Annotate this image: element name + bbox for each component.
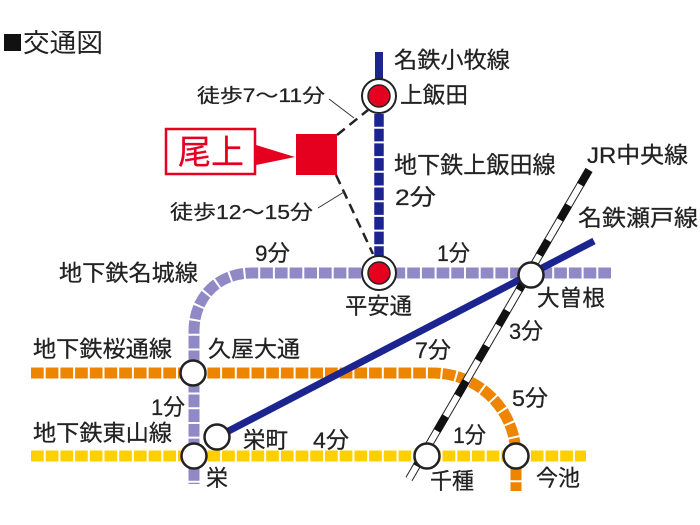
label: 1 minute Chikusa: 1分 — [453, 423, 486, 448]
station: Kamiiida — [362, 79, 396, 113]
label: 9 minutes: 9分 — [255, 241, 290, 266]
label: 2 minutes: 2分 — [395, 185, 436, 210]
label: Sakaemachi station: 栄町 — [243, 428, 288, 453]
label: walk 7-11 minutes: 徒歩7～11分 — [197, 85, 325, 107]
leader: walk 12-15 — [318, 192, 344, 208]
leader: walk 7-11 — [329, 99, 354, 118]
label: Meijo subway line: 地下鉄名城線 — [59, 261, 198, 286]
title: 交通図 — [23, 28, 103, 58]
line: Higashiyama subway — [31, 450, 586, 462]
label: Chikusa station: 千種 — [430, 469, 474, 494]
station: Hisaya-odori — [180, 360, 206, 386]
label: Imaike station: 今池 — [536, 466, 580, 491]
marker: Onoe location — [296, 134, 337, 175]
label: 3 minutes: 3分 — [509, 319, 543, 344]
station: Chikusa — [414, 444, 440, 468]
line: Meijo subway — [194, 273, 611, 484]
label: Meitetsu Komaki line: 名鉄小牧線 — [394, 48, 510, 73]
station: Sakae — [182, 444, 206, 468]
label: 5 minutes: 5分 — [512, 386, 548, 411]
station: Imaike — [504, 444, 528, 468]
label: Higashiyama subway line: 地下鉄東山線 — [33, 421, 172, 446]
label: walk 12-15 minutes: 徒歩12～15分 — [170, 201, 313, 224]
label: Sakae station: 栄 — [206, 466, 228, 491]
station: Heian-dori — [362, 256, 396, 290]
station: Ozone — [518, 262, 544, 288]
label: Kamiiida station: 上飯田 — [400, 83, 468, 108]
callout: Onoe: 尾上 — [178, 134, 244, 172]
label: Meitetsu Seto line: 名鉄瀬戸線 — [578, 206, 698, 231]
walking route: to Heian-dori — [336, 175, 373, 254]
label: Kamiiida subway line: 地下鉄上飯田線 — [394, 152, 556, 178]
label: 1 minute east: 1分 — [437, 241, 470, 266]
label: 7 minutes: 7分 — [415, 338, 451, 363]
line: JR Chuo — [409, 170, 589, 479]
station: Sakaemachi — [204, 424, 230, 450]
label: Sakura-dori subway line: 地下鉄桜通線 — [33, 337, 172, 362]
label: 1 minute Sakae: 1分 — [151, 395, 185, 420]
label: Heian-dori station: 平安通 — [345, 294, 412, 319]
line: Sakura-dori subway — [31, 373, 516, 491]
label: JR Chuo line: JR中央線 — [587, 143, 688, 168]
label: 4 minutes: 4分 — [313, 428, 349, 453]
line: Meitetsu Seto — [217, 241, 594, 437]
line: Kamiiida subway — [375, 52, 383, 262]
label: Hisaya-odori station: 久屋大通 — [208, 337, 300, 362]
callout: Onoe — [166, 129, 295, 174]
walking route: to Kamiiida — [337, 110, 368, 135]
label: Ozone station: 大曽根 — [537, 286, 605, 311]
